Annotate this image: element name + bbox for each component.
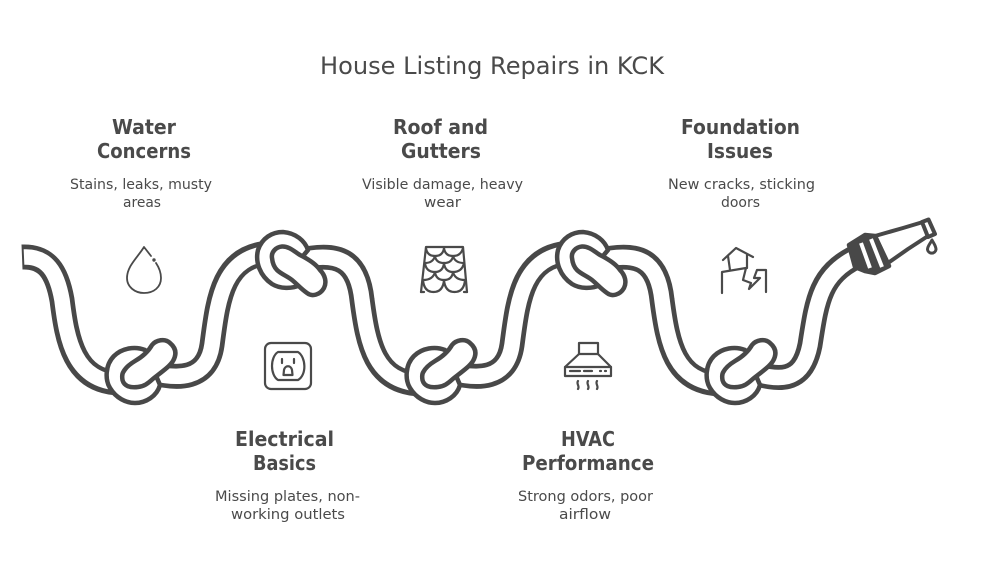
heading: hvac performance — [522, 427, 654, 475]
title: House Listing Repairs in KCK — [320, 52, 665, 80]
hose segment: second to third knot — [296, 257, 422, 384]
icon: range hood — [565, 343, 611, 389]
panel: hvac performance — [518, 343, 654, 523]
hose segment: fifth knot to nozzle — [748, 256, 858, 378]
description: hvac performance: Strong odors, poor — [518, 489, 653, 505]
description: roof and gutters: wear — [424, 195, 461, 211]
panel: foundation issues — [668, 115, 815, 293]
heading: hvac performance: Performance — [522, 451, 654, 475]
panel: electrical basics — [215, 343, 360, 523]
heading: roof and gutters: Gutters — [401, 139, 481, 163]
heading: hvac performance: HVAC — [561, 427, 615, 451]
heading: water concerns — [97, 115, 191, 163]
description: water concerns: areas — [123, 195, 161, 211]
heading: electrical basics — [235, 427, 334, 475]
nozzle — [849, 220, 936, 273]
knot 4 — [557, 232, 625, 295]
heading: foundation issues: Issues — [707, 139, 773, 163]
description: electrical basics — [215, 489, 360, 523]
description: water concerns: Stains, leaks, musty — [70, 177, 212, 193]
hose segment: third to fourth knot — [448, 253, 572, 376]
icon: electrical outlet — [265, 343, 311, 389]
description: roof and gutters: Visible damage, heavy — [362, 177, 523, 193]
icon: roof shingles — [421, 247, 467, 292]
description: hvac performance — [518, 489, 653, 523]
knot 1 — [107, 340, 175, 403]
description: hvac performance: airflow — [559, 507, 611, 523]
description: electrical basics: working outlets — [231, 507, 345, 523]
hose segment: start to first knot — [22, 257, 122, 383]
hose segment: fourth to fifth knot — [596, 257, 722, 384]
knot 2 — [257, 232, 325, 295]
heading: water concerns: Water — [112, 115, 176, 139]
description: foundation issues: New cracks, sticking — [668, 177, 815, 193]
icon: water drop — [127, 247, 161, 293]
heading: roof and gutters — [393, 115, 488, 163]
description: foundation issues — [668, 177, 815, 211]
hose segment: first to second knot — [148, 253, 272, 376]
heading: water concerns: Concerns — [97, 139, 191, 163]
panel: roof and gutters — [362, 115, 523, 292]
hose with knots — [22, 220, 936, 403]
heading: foundation issues: Foundation — [681, 115, 800, 139]
description: foundation issues: doors — [721, 195, 760, 211]
knot 3 — [407, 340, 475, 403]
heading: roof and gutters: Roof and — [393, 115, 488, 139]
knot 5 — [707, 340, 775, 403]
description: roof and gutters — [362, 177, 523, 211]
description: water concerns — [70, 177, 212, 211]
heading: foundation issues — [681, 115, 800, 163]
heading: electrical basics: Electrical — [235, 427, 334, 451]
icon: cracked foundation — [722, 248, 766, 293]
heading: electrical basics: Basics — [253, 451, 316, 475]
description: electrical basics: Missing plates, non- — [215, 489, 360, 505]
panel: water concerns — [70, 115, 212, 293]
